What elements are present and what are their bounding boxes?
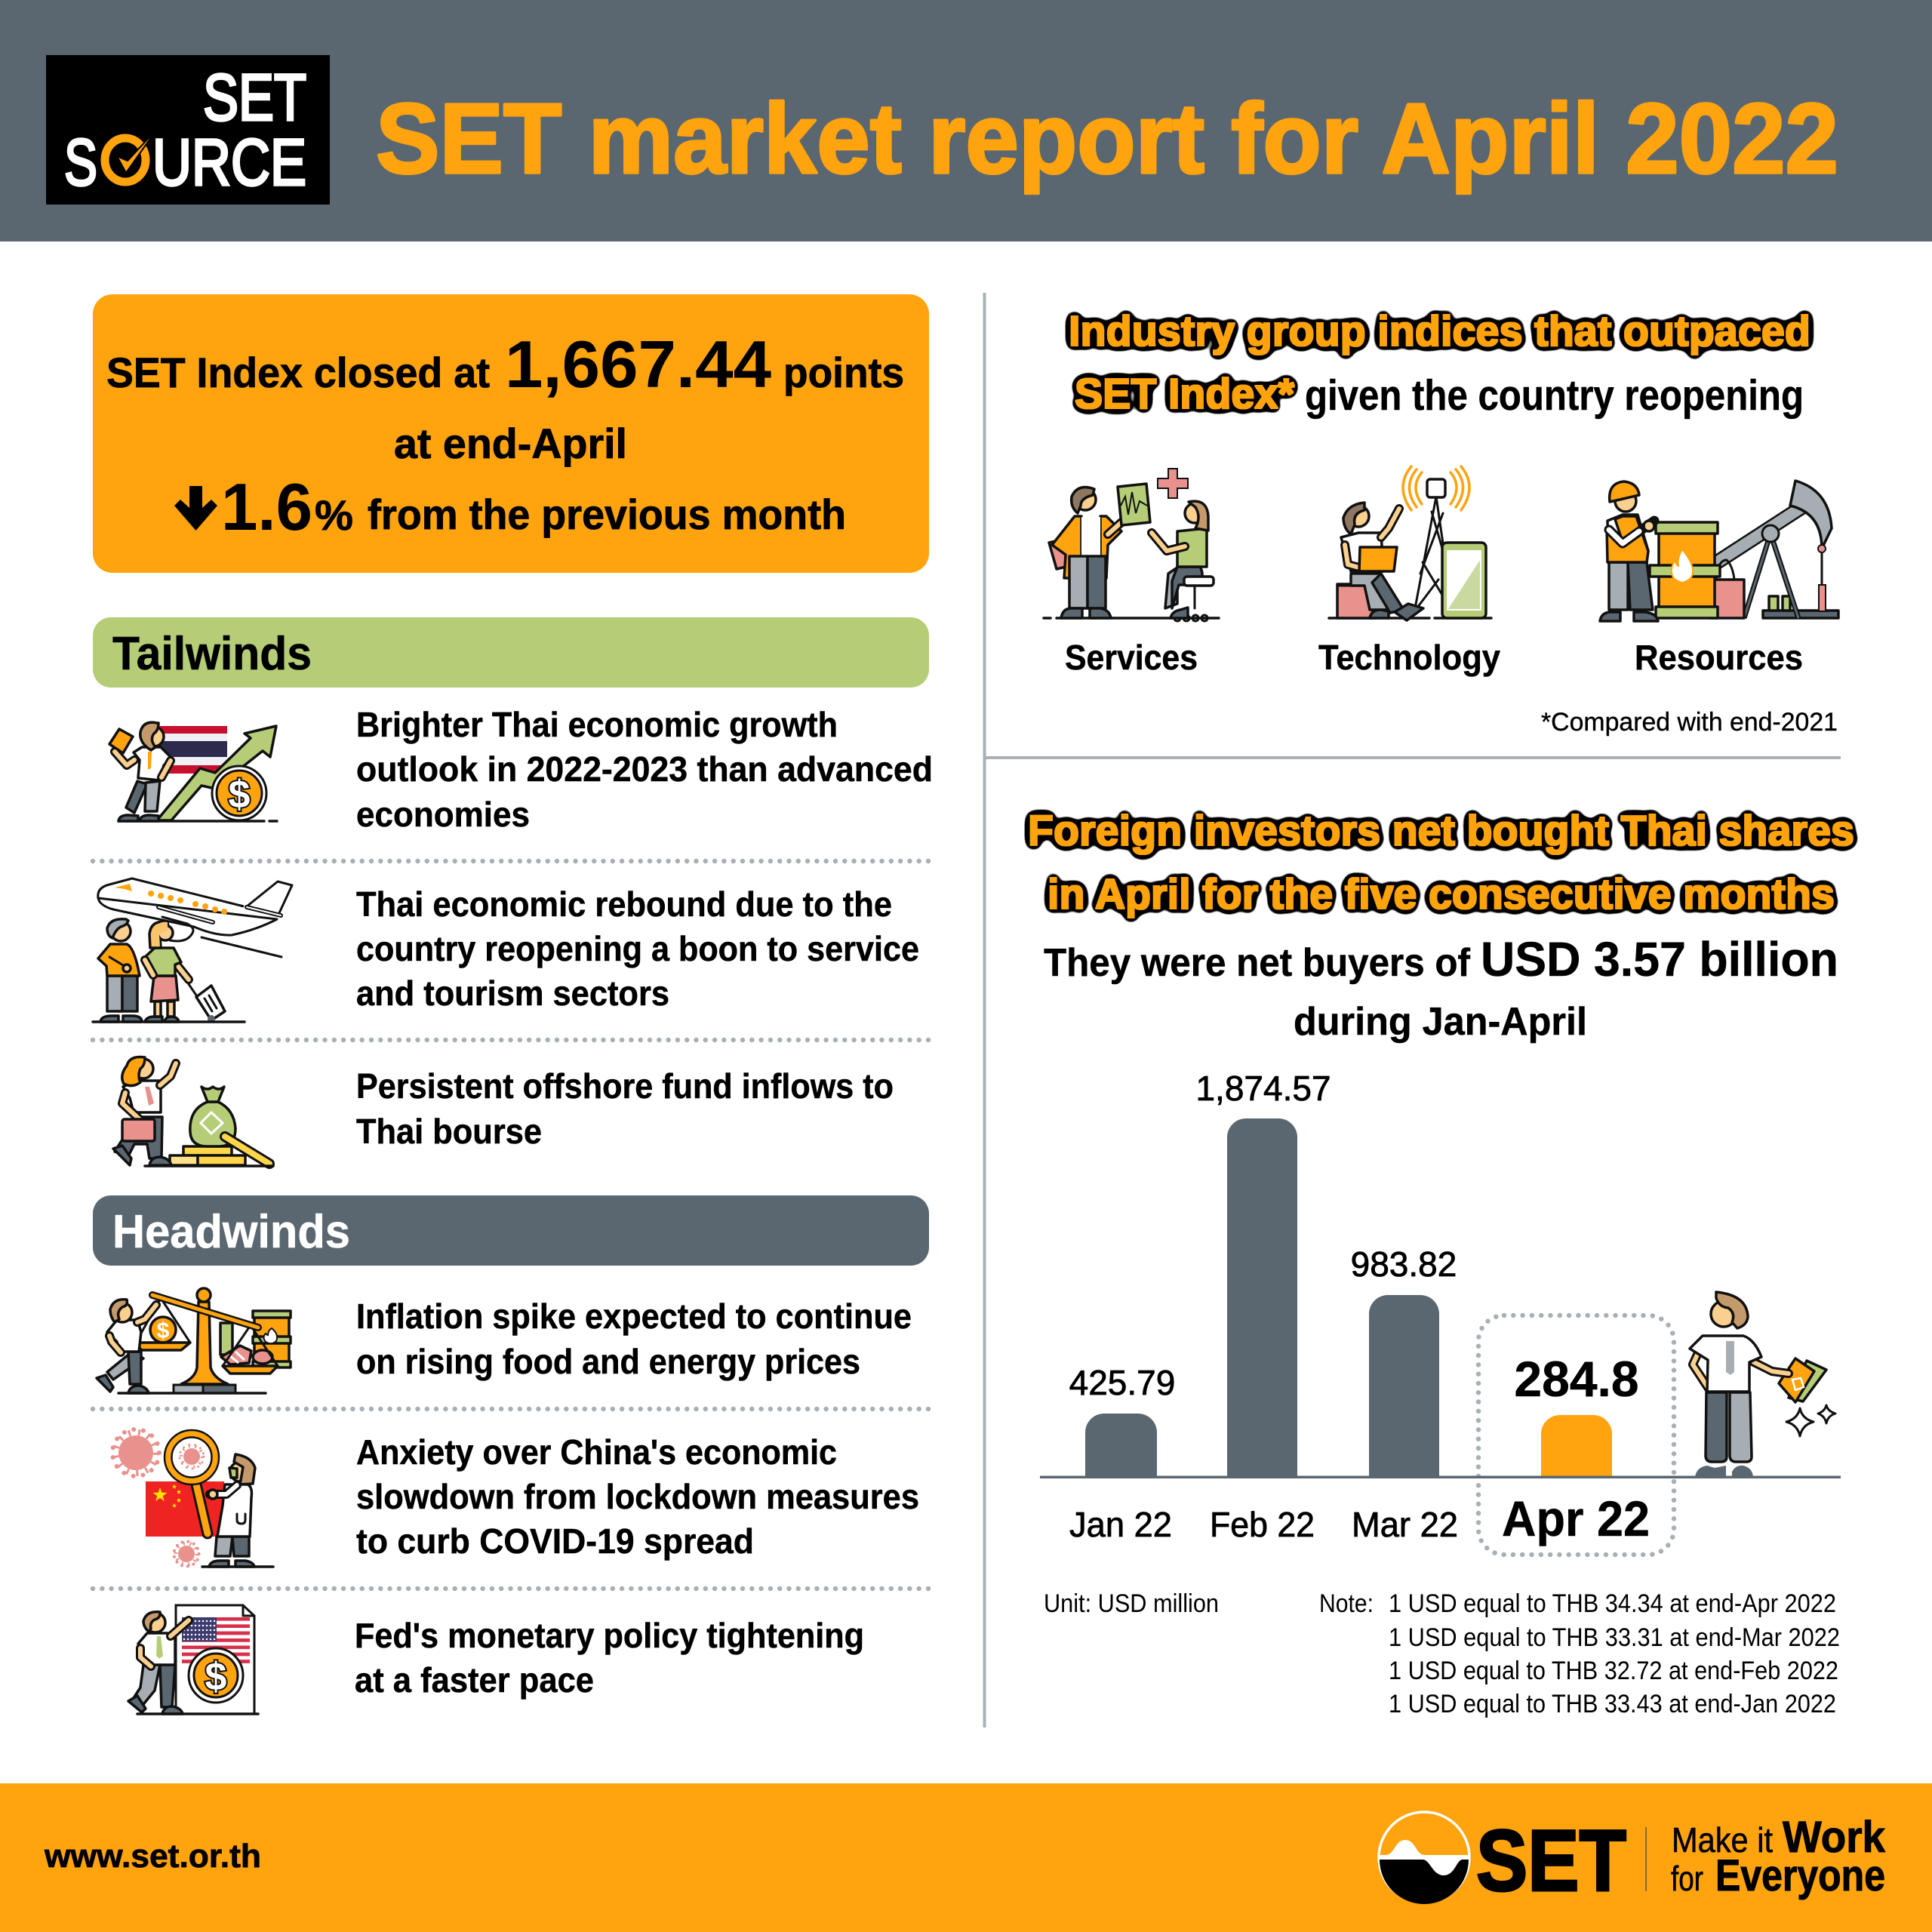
logo: SET Source: SET (203, 61, 306, 134)
slogan: Make it (1672, 1820, 1773, 1860)
bar chart: net foreign buying: Apr 22 (1502, 1491, 1650, 1546)
label: Resources: Resources (1635, 638, 1803, 677)
heading: foreign investors: in April for the five consecutive months (1048, 870, 1835, 918)
icon: scale with food and energy: $ (157, 1318, 170, 1343)
header band (0, 0, 1932, 242)
bar chart: net foreign buying: 284.8 (1514, 1351, 1639, 1407)
text: exchange rate notes: 1 USD equal to THB 33.43 at end-Jan 2022 (1389, 1690, 1836, 1718)
text: Fed tightening: Fed's monetary policy tightening (355, 1616, 864, 1655)
text: exchange rate notes: 1 USD equal to THB 33.31 at end-Mar 2022 (1389, 1623, 1840, 1652)
heading: industry groups (1069, 307, 1810, 420)
panel: foreign investors (1028, 807, 1854, 1718)
label: Services: Services (1065, 638, 1198, 677)
panel: tailwinds (93, 617, 933, 1166)
text: reopening rebound: country reopening a boon to service (356, 929, 919, 968)
text: inflation: Inflation spike expected to continue (356, 1297, 912, 1336)
text: fund inflows: Thai bourse (356, 1112, 542, 1151)
callout: SET Index summary: 1,667.44 (505, 327, 771, 401)
bar chart: net foreign buying: Mar 22 (1352, 1505, 1458, 1544)
heading: foreign investors: during Jan-April (1294, 1000, 1587, 1044)
heading: foreign investors (1028, 807, 1854, 1044)
text: China slowdown (356, 1432, 919, 1561)
heading: industry groups: SET Index* (1075, 370, 1295, 418)
slogan (1671, 1813, 1886, 1900)
text: China slowdown: Anxiety over China's economic (356, 1432, 837, 1472)
text: Fed tightening: at a faster pace (355, 1660, 594, 1700)
heading: Headwinds (93, 1195, 929, 1266)
bar chart: net foreign buying: Feb 22 (1210, 1505, 1315, 1544)
icon: China flag and virus inspection (112, 1429, 273, 1567)
bar chart: net foreign buying: 1,874.57 (1195, 1069, 1331, 1108)
slogan: Work (1783, 1813, 1886, 1862)
text: reopening rebound (356, 884, 919, 1013)
text: exchange rate notes: 1 USD equal to THB 32.72 at end-Feb 2022 (1389, 1657, 1838, 1685)
heading: Tailwinds: Tailwinds (112, 628, 312, 680)
text: inflation (356, 1297, 912, 1381)
panel: industry group indices (1044, 307, 1838, 737)
callout: SET Index summary: from the previous month (368, 491, 846, 538)
text: growth outlook: outlook in 2022-2023 than advanced (356, 749, 933, 789)
callout: SET Index summary: SET Index closed at (106, 349, 490, 396)
text: inflation: on rising food and energy prices (356, 1342, 860, 1381)
label: Technology: Technology (1318, 638, 1500, 677)
text: reopening rebound: Thai economic rebound due to the (356, 884, 892, 924)
icon: technology (1329, 466, 1491, 620)
text: reopening rebound: and tourism sectors (356, 974, 669, 1013)
text: exchange rate notes: 1 USD equal to THB 34.34 at end-Apr 2022 (1389, 1589, 1836, 1618)
icon: services (1044, 469, 1219, 621)
title: SET market report for April 2022 (376, 83, 1838, 194)
icon: airplane and travellers (93, 878, 292, 1023)
logo: SET Source: S (64, 126, 97, 199)
icon: Thai growth arrow and coin: $ (229, 773, 251, 817)
text: growth outlook (356, 705, 933, 834)
icon: scale with food and energy (97, 1288, 291, 1393)
text: Fed tightening (355, 1616, 864, 1700)
text: China slowdown: to curb COVID-19 spread (356, 1521, 754, 1561)
heading: industry groups: Industry group indices that outpaced (1069, 307, 1810, 355)
callout: SET Index summary (93, 294, 929, 573)
logo: SET Source (46, 55, 330, 205)
callout: SET Index summary: at end-April (394, 420, 627, 467)
highlight box: April (1478, 1315, 1674, 1555)
callout: SET Index summary: % (315, 491, 353, 539)
heading: industry groups: given the country reopening (1305, 371, 1804, 420)
heading: Headwinds: Headwinds (112, 1206, 350, 1258)
logo: SET emblem: SET (1476, 1813, 1626, 1909)
text: exchange rate notes: Note: (1319, 1589, 1374, 1618)
text: China slowdown: slowdown from lockdown measures (356, 1477, 919, 1516)
text: unit: Unit: USD million (1044, 1589, 1219, 1618)
text: exchange rate notes (1319, 1589, 1840, 1718)
callout: SET Index summary: points (783, 349, 904, 396)
text: fund inflows (356, 1066, 894, 1151)
callout: SET Index summary: 1.6 (221, 469, 312, 544)
website: www.set.or.th (44, 1838, 261, 1875)
slogan: Everyone (1715, 1851, 1885, 1900)
heading: foreign investors: They were net buyers of (1044, 941, 1471, 985)
icon: investor with money bag (113, 1057, 273, 1166)
text: fund inflows: Persistent offshore fund inflows to (356, 1066, 894, 1106)
logo: SET emblem (1379, 1812, 1626, 1909)
icon: resources (1600, 481, 1838, 621)
bar chart: net foreign buying: 983.82 (1351, 1244, 1457, 1284)
icon: businessman with money (1690, 1292, 1835, 1477)
text: growth outlook: economies (356, 795, 530, 834)
heading: foreign investors: USD 3.57 billion (1481, 932, 1838, 986)
logo: SET Source: URCE (152, 126, 306, 199)
icon: US flag document and coin: $ (205, 1655, 227, 1699)
text: growth outlook: Brighter Thai economic growth (356, 705, 838, 744)
bar chart: net foreign buying: 425.79 (1069, 1363, 1175, 1402)
heading: Tailwinds (93, 617, 929, 688)
icon: down arrow (174, 486, 217, 531)
slogan: for (1671, 1859, 1703, 1898)
footnote: comparison: *Compared with end-2021 (1541, 708, 1838, 737)
bar chart: net foreign buying: Jan 22 (1069, 1505, 1172, 1544)
icon: US flag document and coin (128, 1605, 258, 1714)
icon: Thai growth arrow and coin (109, 722, 277, 821)
heading: foreign investors: Foreign investors net bought Thai shares (1028, 807, 1854, 855)
panel: headwinds (93, 1195, 931, 1714)
bar chart: net foreign buying (1040, 1069, 1841, 1555)
footer band (0, 1783, 1932, 1932)
